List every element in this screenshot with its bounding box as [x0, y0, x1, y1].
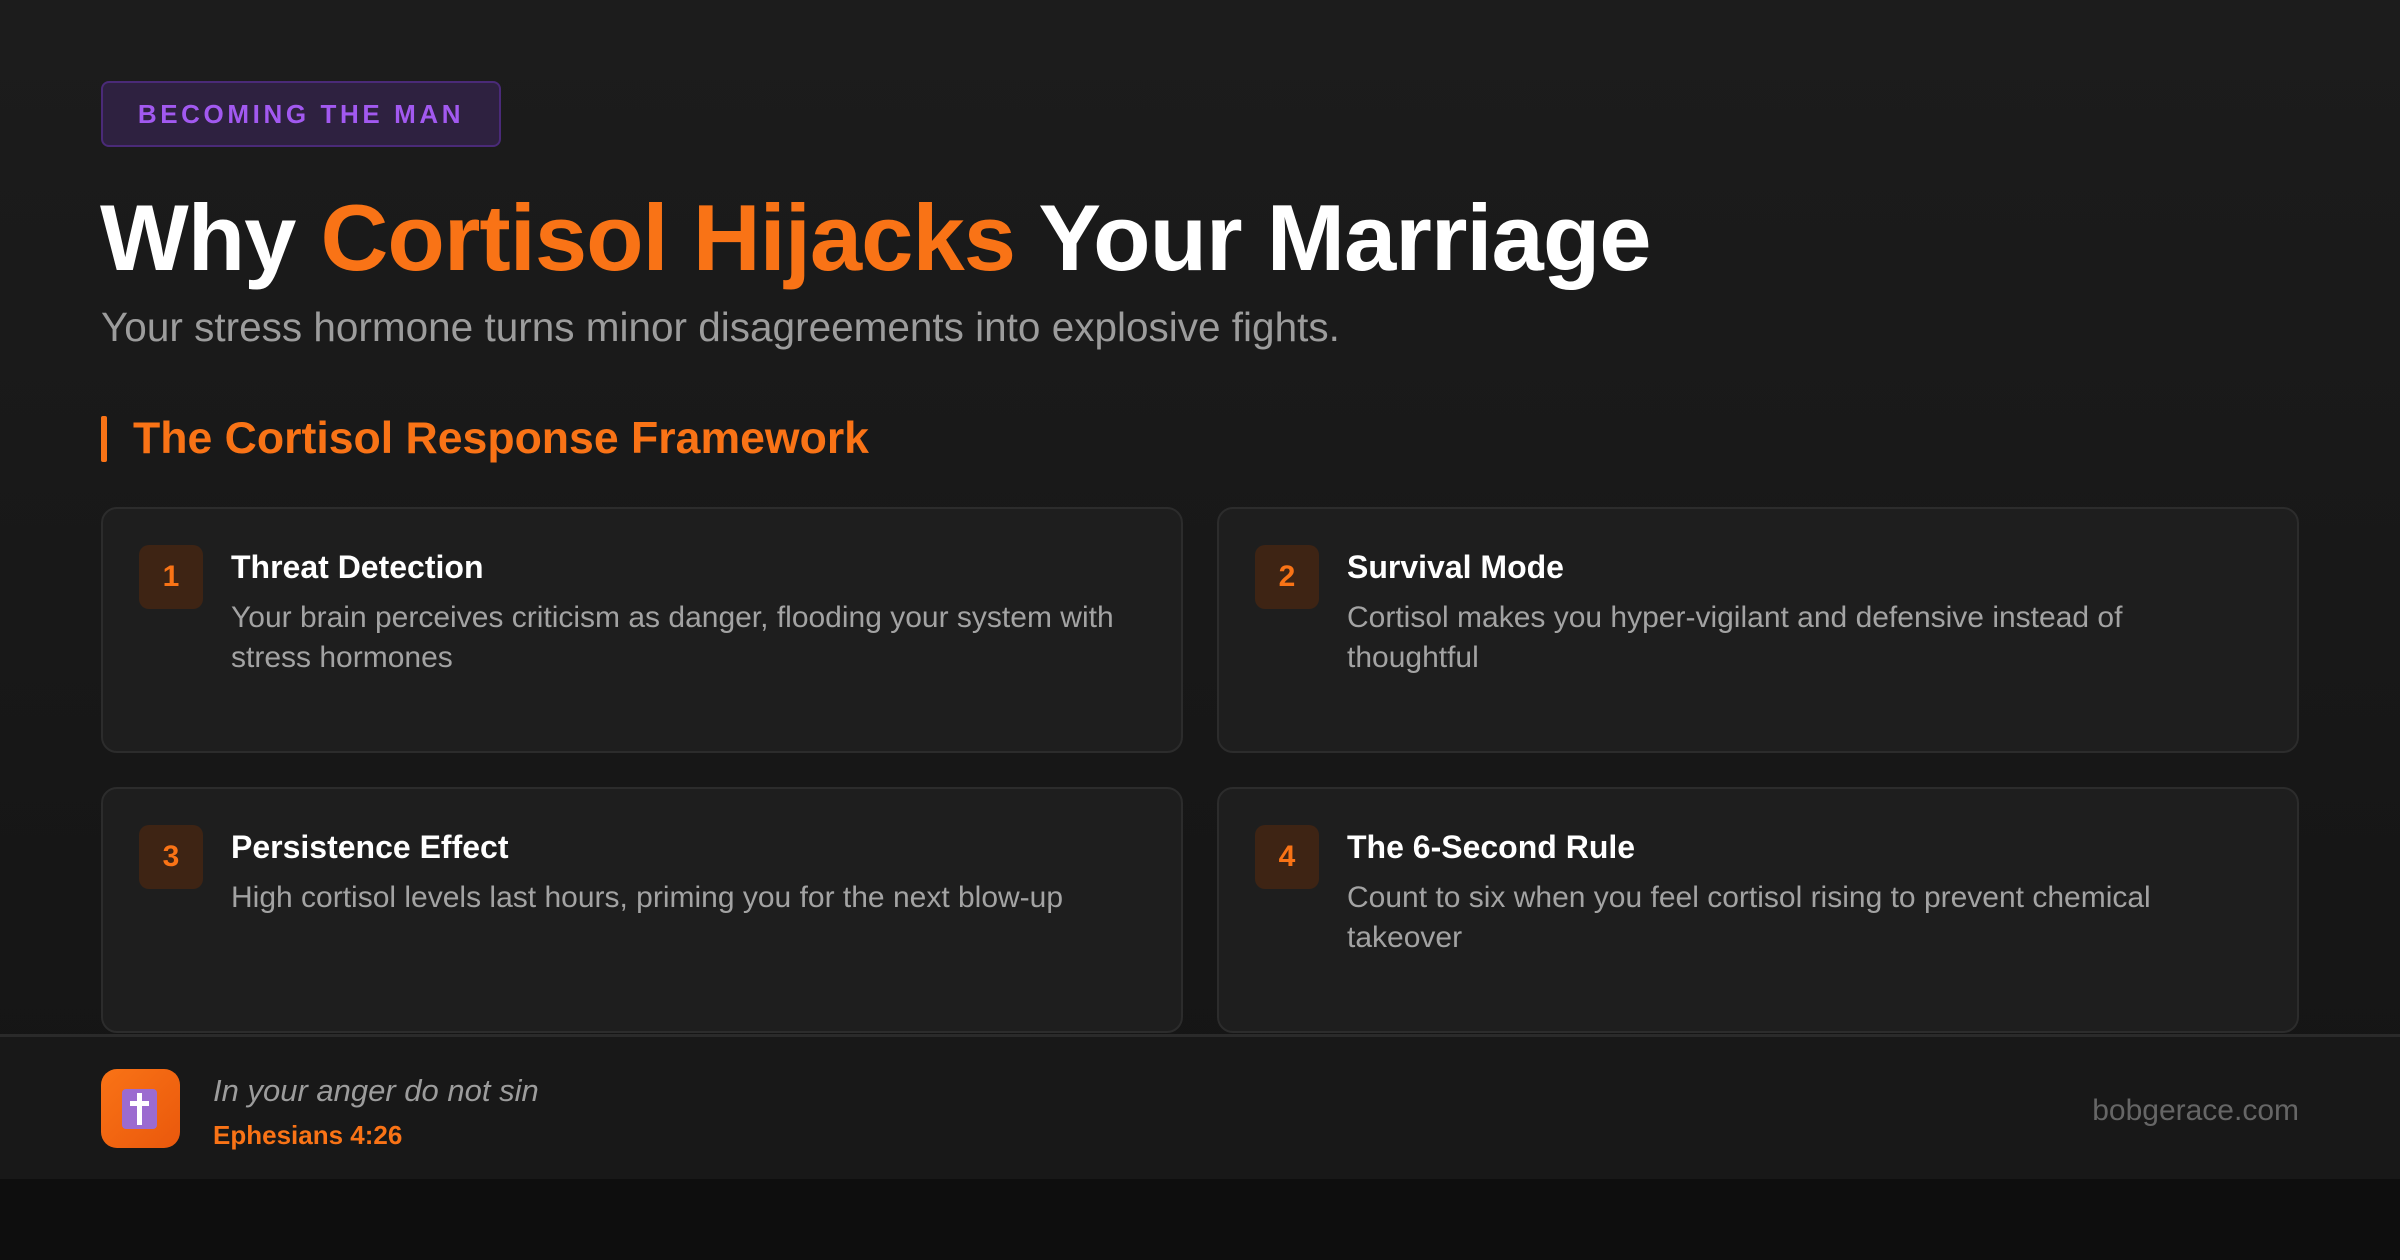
section heading: The Cortisol Response Framework [133, 414, 869, 463]
badge [101, 81, 501, 147]
site url: bobgerace.com [2092, 1094, 2299, 1127]
icon: cross [101, 1069, 180, 1148]
number 1 [139, 545, 203, 609]
number 3: 3 [163, 840, 179, 873]
reference: Ephesians 4:26 [213, 1120, 402, 1150]
card description: Count to six when you feel cortisol rising to prevent chemical takeover [1347, 881, 2151, 954]
footer [0, 1034, 2400, 1179]
card description: Your brain perceives criticism as danger, flooding your system with stress hormones [231, 601, 1114, 674]
card title: Survival Mode [1347, 549, 1564, 585]
number 3 [139, 825, 203, 889]
number 1: 1 [163, 560, 179, 593]
badge: BECOMING THE MAN [138, 99, 464, 129]
card 4 [1217, 787, 2299, 1033]
number 2 [1255, 545, 1319, 609]
bottom strip [0, 1179, 2400, 1260]
number 2: 2 [1279, 560, 1295, 593]
section accent bar [101, 416, 107, 462]
card description: Cortisol makes you hyper-vigilant and defensive instead of thoughtful [1347, 601, 2122, 674]
title: Why Cortisol Hijacks Your Marriage [100, 185, 1651, 290]
card title: Threat Detection [231, 549, 483, 585]
quote: In your anger do not sin [213, 1073, 539, 1108]
card title: The 6-Second Rule [1347, 829, 1635, 865]
card 2 [1217, 507, 2299, 753]
card 3 [101, 787, 1183, 1033]
subtitle: Your stress hormone turns minor disagreements into explosive fights. [101, 304, 1340, 350]
card description: High cortisol levels last hours, priming you for the next blow-up [231, 881, 1063, 914]
number 4 [1255, 825, 1319, 889]
card 1 [101, 507, 1183, 753]
number 4: 4 [1279, 840, 1295, 873]
card title: Persistence Effect [231, 829, 508, 865]
